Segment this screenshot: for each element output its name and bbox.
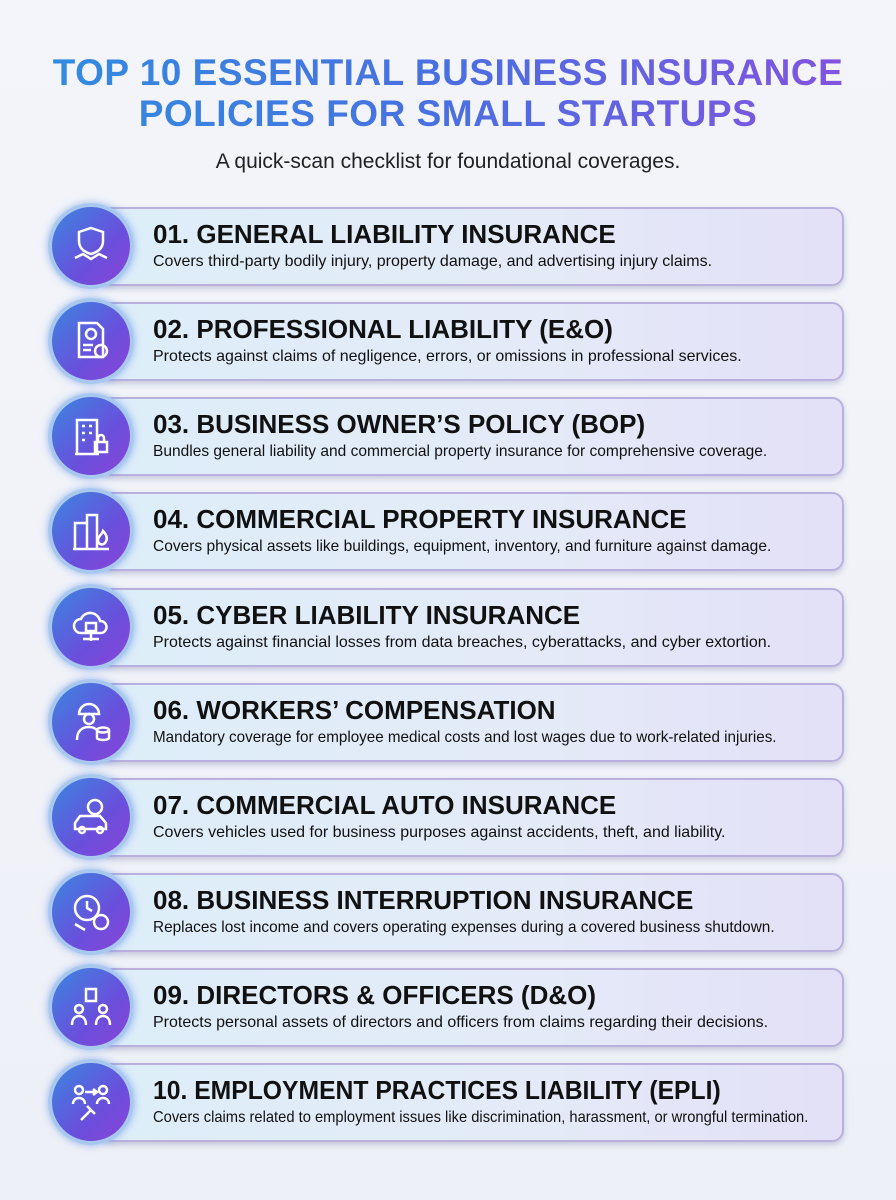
item 08: 08. BUSINESS INTERRUPTION INSURANCE xyxy=(153,885,693,915)
item 03: Bundles general liability and commercial property insurance for comprehensive coverage. xyxy=(153,443,767,460)
item 10: 10. EMPLOYMENT PRACTICES LIABILITY (EPLI) xyxy=(153,1075,721,1105)
item 06: 06. WORKERS’ COMPENSATION xyxy=(153,695,556,725)
item 05: 05. CYBER LIABILITY INSURANCE xyxy=(153,600,580,630)
item 07 xyxy=(43,769,846,865)
item 05: Protects against financial losses from data breaches, cyberattacks, and cyber extortion. xyxy=(153,634,771,651)
icon: document gear xyxy=(48,298,134,384)
item 09 xyxy=(43,959,846,1055)
icon: clock dollar xyxy=(48,869,134,955)
item 03 xyxy=(43,388,846,484)
item 01: Covers third-party bodily injury, property damage, and advertising injury claims. xyxy=(153,253,712,270)
item 01: 01. GENERAL LIABILITY INSURANCE xyxy=(153,219,616,249)
item 02: 02. PROFESSIONAL LIABILITY (E&O) xyxy=(153,314,613,344)
item 01 xyxy=(43,198,846,294)
item 06 xyxy=(43,674,846,770)
title: POLICIES FOR SMALL STARTUPS xyxy=(139,93,757,134)
item 03: 03. BUSINESS OWNER’S POLICY (BOP) xyxy=(153,409,645,439)
item 04: Covers physical assets like buildings, equipment, inventory, and furniture against damage. xyxy=(153,538,771,555)
icon: building lock xyxy=(48,393,134,479)
icon: cloud lock xyxy=(48,584,134,670)
item 07: 07. COMMERCIAL AUTO INSURANCE xyxy=(153,790,616,820)
item 02: Protects against claims of negligence, errors, or omissions in professional services. xyxy=(153,348,742,365)
icon: directors xyxy=(48,964,134,1050)
item 06: Mandatory coverage for employee medical costs and lost wages due to work-related injuries. xyxy=(153,729,777,746)
title: TOP 10 ESSENTIAL BUSINESS INSURANCE xyxy=(53,52,843,93)
subtitle: A quick-scan checklist for foundational coverages. xyxy=(216,150,680,173)
item 07: Covers vehicles used for business purposes against accidents, theft, and liability. xyxy=(153,824,725,841)
icon: shield handshake xyxy=(48,203,134,289)
item 08 xyxy=(43,864,846,960)
item 02 xyxy=(43,293,846,389)
item 10: Covers claims related to employment issues like discrimination, harassment, or wrongful termination. xyxy=(153,1109,808,1126)
item 04 xyxy=(43,483,846,579)
item 10 xyxy=(43,1054,846,1150)
icon: worker coins xyxy=(48,679,134,765)
item 04: 04. COMMERCIAL PROPERTY INSURANCE xyxy=(153,504,687,534)
icon: people gavel xyxy=(48,1059,134,1145)
title xyxy=(0,52,896,134)
icon: car xyxy=(48,774,134,860)
icon: building fire xyxy=(48,488,134,574)
item 09: 09. DIRECTORS & OFFICERS (D&O) xyxy=(153,980,596,1010)
item 05 xyxy=(43,579,846,675)
item 09: Protects personal assets of directors and officers from claims regarding their decisions. xyxy=(153,1014,768,1031)
item 08: Replaces lost income and covers operating expenses during a covered business shutdown. xyxy=(153,919,775,936)
